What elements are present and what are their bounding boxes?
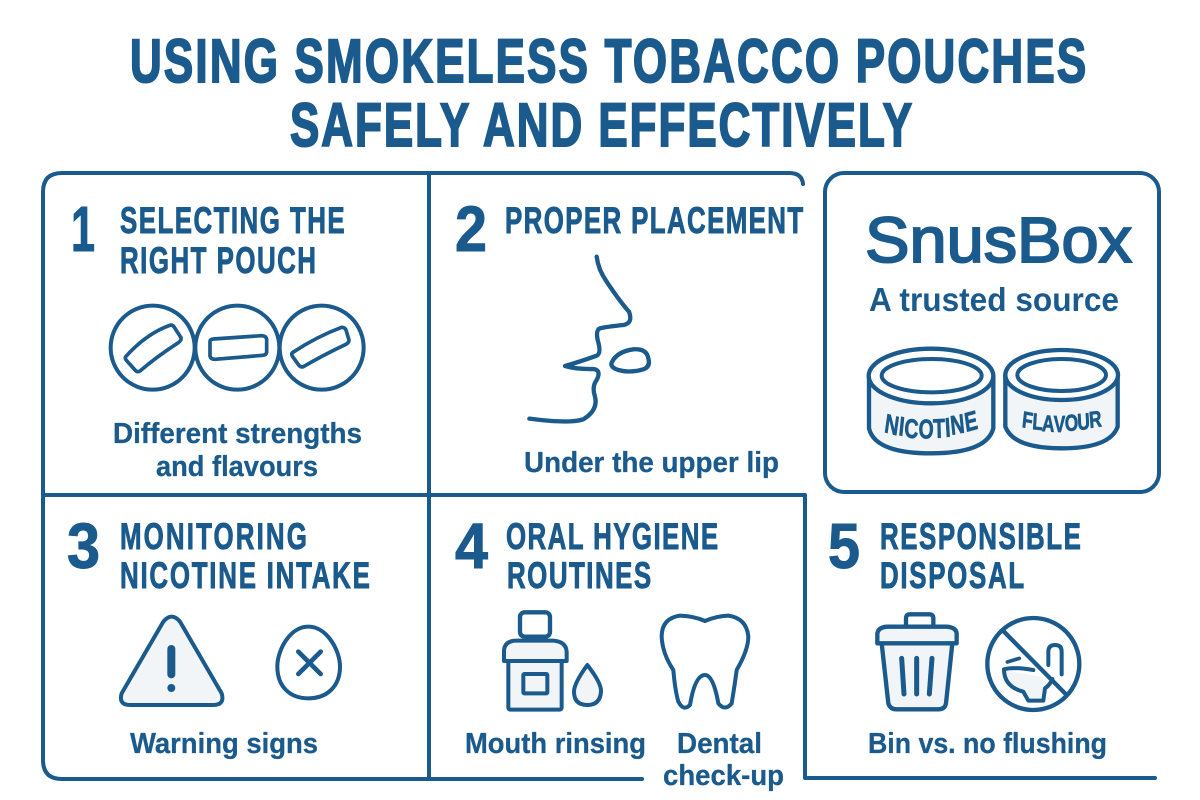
heading: oral hygiene routines: ROUTINES	[507, 554, 651, 596]
step number 2: 2	[455, 193, 487, 265]
tagline: A trusted source	[869, 281, 1119, 318]
heading: monitoring nicotine intake: NICOTINE INTAKE	[120, 554, 370, 596]
caption: dental check-up	[663, 728, 784, 792]
heading: selecting the right pouch	[120, 199, 345, 281]
caption: mouth rinsing: Mouth rinsing	[465, 728, 646, 760]
panel: step 1 selecting the right pouch	[71, 193, 364, 483]
icon: nicotine can: NICOTINE	[883, 405, 979, 444]
title: USING SMOKELESS TOBACCO POUCHES	[130, 28, 1086, 96]
grid frame	[43, 173, 1155, 779]
brand name: SnusBox	[865, 204, 1132, 276]
icon: nicotine can	[869, 349, 993, 453]
icon: three pouches in circles	[111, 306, 364, 390]
step number 5: 5	[828, 510, 860, 582]
icon: egg-shaped pouch with cross	[277, 627, 340, 698]
title	[130, 28, 1086, 160]
caption: different strengths and flavours: Different strengths	[113, 418, 362, 450]
caption: under the upper lip: Under the upper lip	[524, 447, 779, 479]
heading: monitoring nicotine intake: MONITORING	[120, 515, 307, 557]
step number 1: 1	[71, 193, 95, 265]
panel: step 2 proper placement	[455, 193, 804, 479]
panel: step 3 monitoring nicotine intake	[67, 510, 370, 760]
caption: warning signs: Warning signs	[130, 728, 318, 760]
heading: proper placement: PROPER PLACEMENT	[505, 199, 804, 241]
heading: selecting the right pouch: SELECTING THE	[120, 199, 345, 241]
icon: face profile with pouch under lip	[529, 257, 649, 422]
caption: dental check-up: check-up	[663, 760, 784, 792]
heading: selecting the right pouch: RIGHT POUCH	[120, 239, 316, 281]
heading: responsible disposal	[880, 515, 1081, 596]
icon: tooth	[662, 616, 748, 708]
title: SAFELY AND EFFECTIVELY	[290, 92, 912, 160]
caption: different strengths and flavours	[113, 418, 362, 483]
panel: step 5 responsible disposal	[828, 510, 1107, 760]
caption: dental check-up: Dental	[677, 728, 762, 760]
caption: different strengths and flavours: and flavours	[156, 451, 318, 483]
icon: warning triangle	[121, 617, 222, 705]
heading: monitoring nicotine intake	[120, 515, 370, 596]
icon: mouthwash bottle and drop	[504, 612, 601, 710]
icon: trash bin	[877, 614, 957, 709]
panel: SnusBox trusted source	[825, 173, 1159, 492]
step number 4: 4	[455, 510, 488, 582]
heading: oral hygiene routines: ORAL HYGIENE	[506, 515, 718, 557]
icon: flavour can: FLAVOUR	[1021, 407, 1103, 438]
heading: responsible disposal: DISPOSAL	[880, 554, 1024, 596]
panel border	[825, 173, 1159, 492]
icon: no flushing sign	[987, 618, 1079, 710]
step number 3: 3	[67, 510, 100, 582]
caption: bin vs. no flushing: Bin vs. no flushing	[868, 728, 1107, 760]
icon: flavour can	[1005, 350, 1118, 448]
panel: step 4 oral hygiene routines	[455, 510, 784, 792]
heading: responsible disposal: RESPONSIBLE	[880, 515, 1081, 557]
heading: oral hygiene routines	[506, 515, 718, 596]
